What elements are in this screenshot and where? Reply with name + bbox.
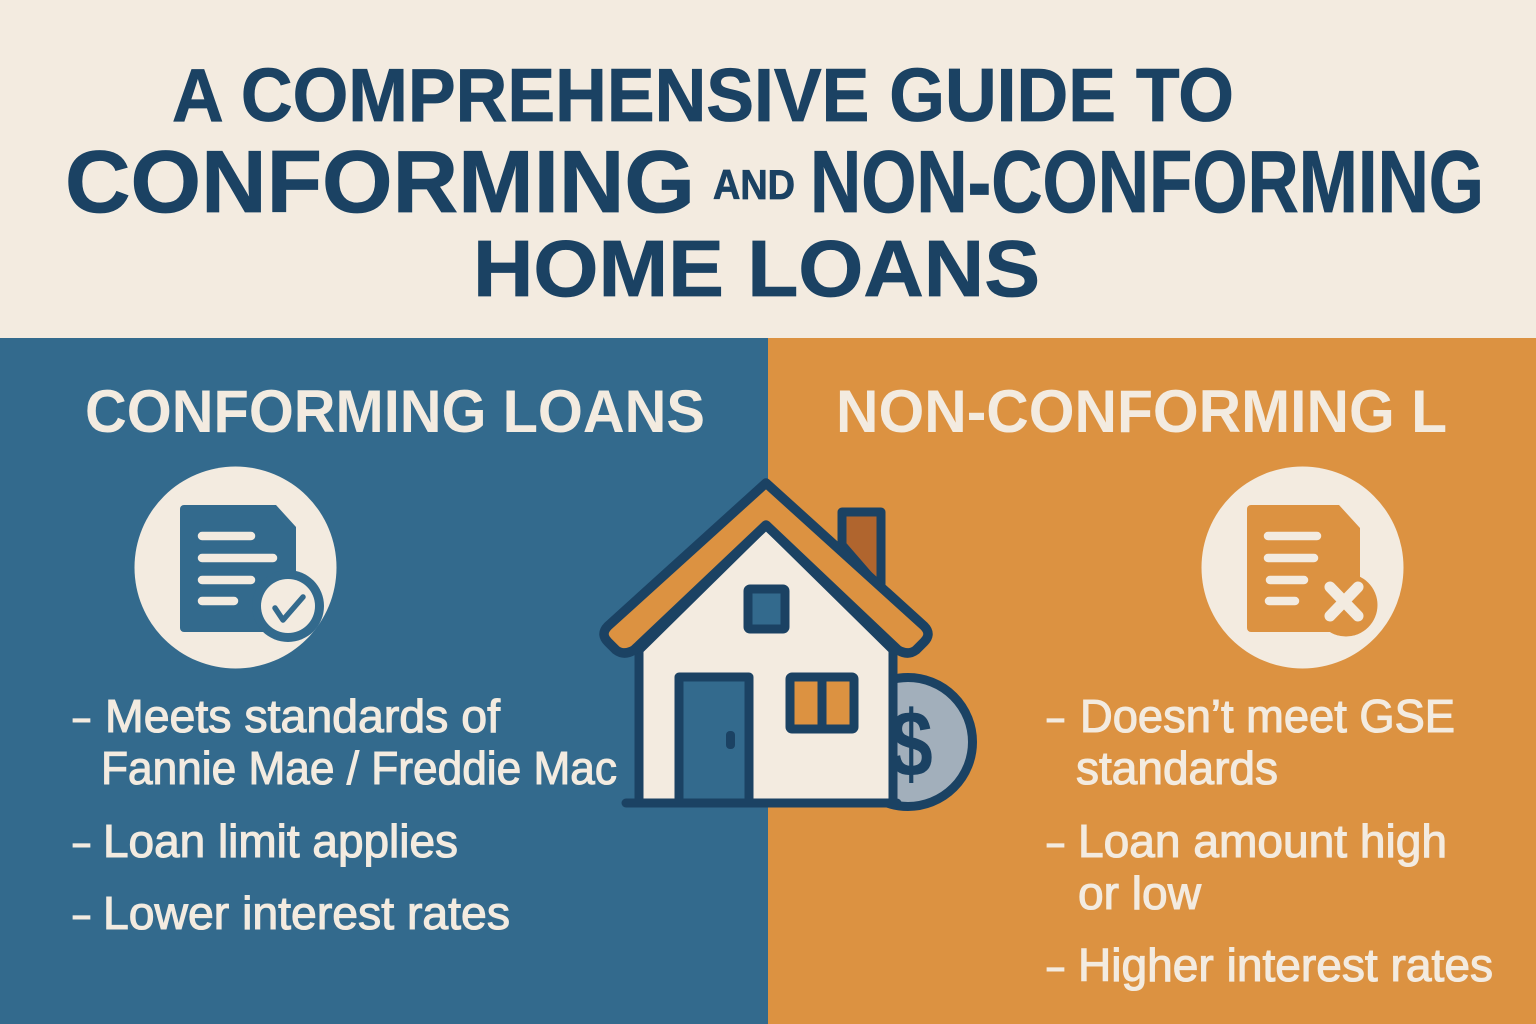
text: conforming loan points: – [73,887,90,939]
text: conforming loan points: Meets standards of [105,690,500,742]
text: conforming loan points: – [73,690,90,742]
icon: dollar coin [844,678,972,806]
text: non-conforming loan points: – [1047,815,1064,867]
title: A COMPREHENSIVE GUIDE TO [172,53,1234,137]
attic window [748,589,785,629]
chimney [842,512,881,590]
panel: conforming loans [0,338,768,1024]
house body [639,525,893,803]
title: HOME LOANS [473,224,1040,313]
title: CONFORMING [65,132,695,231]
side window [790,677,854,729]
text: non-conforming loan points: or low [1078,867,1202,919]
icon: document with check [134,466,336,668]
text: conforming loan points: Fannie Mae / Freddie Mac [101,742,617,794]
icon: document with cross [1202,466,1404,668]
text: non-conforming loan points: – [1047,939,1064,991]
text: conforming loan points: Lower interest rates [103,887,510,939]
text: conforming loan points: Loan limit applies [103,815,458,867]
panel: non-conforming loans [768,338,1536,1024]
text: non-conforming loan points: – [1047,690,1064,742]
ground line [626,798,897,808]
roof [604,483,928,653]
icon: dollar coin: $ [889,692,933,797]
heading: conforming loans: CONFORMING LOANS [85,378,705,445]
text: non-conforming loan points: Loan amount high [1078,815,1447,867]
text: conforming loan points [73,690,617,939]
text: non-conforming loan points: Higher interest rates [1078,939,1493,991]
icon: house with coin [604,483,972,806]
door [679,677,749,803]
text: conforming loan points: – [73,815,90,867]
text: non-conforming loan points: Doesn’t meet GSE [1080,690,1455,742]
text: non-conforming loan points: standards [1076,742,1278,794]
title [65,53,1484,313]
heading: non-conforming loans: NON-CONFORMING L [836,378,1447,445]
title: AND [713,161,795,208]
text: non-conforming loan points [1047,690,1493,991]
